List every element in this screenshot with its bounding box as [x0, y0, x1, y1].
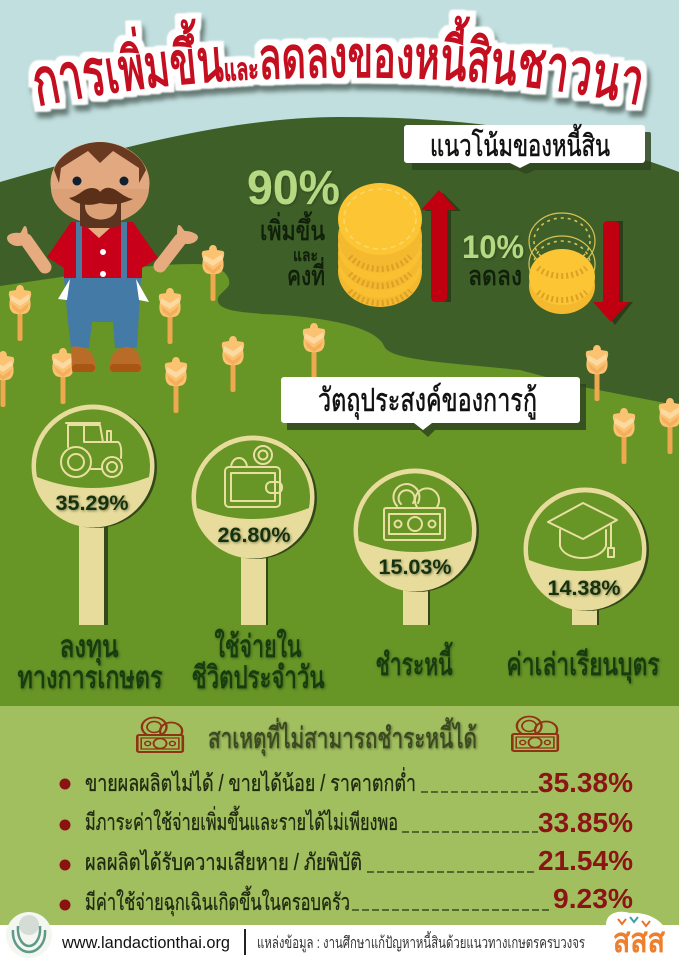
percentage: 26.80% — [218, 523, 290, 547]
reason row 2 — [60, 806, 633, 838]
suspenders — [76, 222, 127, 278]
arrow up — [421, 190, 461, 302]
dark green hill — [0, 117, 679, 440]
reason row 3: ผลผลิตได้รับความเสียหาย / ภัยพิบัติ — [85, 849, 362, 875]
reason row 4: 9.23% — [553, 883, 633, 914]
stat: 90 percent — [247, 162, 340, 291]
pin: farm investment — [32, 404, 157, 625]
reason row 4 — [60, 883, 633, 916]
stat: 90 percent: เพิ่มขึ้น — [260, 211, 325, 246]
reason row 1: ขายผลผลิตไม่ได้ / ขายได้น้อย / ราคาตกต่ำ — [85, 767, 416, 796]
stat: 90 percent: และ — [293, 246, 318, 265]
right arm — [160, 240, 180, 266]
stat: 10 percent — [462, 229, 524, 291]
stat: 90 percent: คงที่ — [287, 257, 325, 291]
left hand — [7, 226, 28, 246]
purpose labels: ชำระหนี้ — [376, 642, 452, 682]
pin: daily expenses — [192, 436, 317, 625]
banner heading: แนวโน้มของหนี้สิน — [430, 124, 610, 163]
purpose labels: ใช้จ่ายใน — [214, 629, 302, 664]
stat: 10 percent: 10% — [462, 229, 524, 265]
moustache — [69, 188, 133, 205]
beard — [80, 200, 121, 228]
collar — [88, 228, 110, 238]
icon: wallet — [225, 446, 282, 507]
percentage: 14.38% — [548, 576, 620, 600]
arrow down — [593, 221, 633, 325]
icon: tractor — [61, 423, 122, 477]
stat: 10 percent: ลดลง — [468, 261, 522, 291]
panel: reasons for non-payment — [0, 706, 679, 926]
icon: money — [384, 484, 445, 540]
purpose labels: ชีวิตประจำวัน — [192, 660, 324, 695]
head — [50, 142, 150, 224]
purpose labels — [18, 629, 660, 695]
stat: 90 percent: 90% — [247, 162, 340, 215]
reason row 4: มีค่าใช้จ่ายฉุกเฉินเกิดขึ้นในครอบครัว — [85, 886, 350, 916]
coin stack: small with faded coins — [529, 213, 595, 314]
farmer illustration — [7, 142, 198, 372]
left arm — [26, 240, 45, 267]
footer — [0, 912, 679, 960]
banner: debt trend — [404, 124, 651, 174]
light green field — [0, 264, 679, 710]
icon: graduation cap — [548, 503, 617, 558]
panel heading: สาเหตุที่ไม่สามารถชำระหนี้ได้ — [208, 717, 477, 756]
pin: debt repayment — [354, 468, 479, 625]
left shoe — [71, 347, 95, 372]
wheat field — [0, 245, 679, 464]
logo: ThaiHealth — [606, 912, 666, 960]
title: การเพิ่มขึ้นและลดลงของหนี้สินชาวนา — [28, 9, 654, 122]
reason row 1 — [60, 767, 633, 798]
reason row 2: มีภาระค่าใช้จ่ายเพิ่มขึ้นและรายได้ไม่เพียงพอ — [85, 806, 398, 835]
purpose labels: ลงทุน — [60, 629, 118, 666]
pin: tuition — [524, 488, 649, 625]
reason row 3 — [60, 845, 633, 876]
shirt buttons — [100, 249, 106, 255]
logo: Land Action Thai — [6, 912, 52, 958]
banner: loan purposes — [281, 377, 586, 437]
reason row 1: 35.38% — [538, 767, 633, 798]
coin stack: large — [338, 183, 422, 307]
icon: money right — [512, 716, 558, 751]
reason row 3: 21.54% — [538, 845, 633, 876]
percentage: 35.29% — [56, 491, 128, 515]
eyes — [72, 176, 82, 186]
website: www.landactionthai.org — [61, 933, 230, 952]
right shoe — [110, 347, 141, 372]
overalls — [64, 278, 141, 348]
red shirt — [47, 222, 158, 278]
hair — [54, 142, 146, 183]
icon: money left — [137, 718, 183, 752]
percentage: 15.03% — [379, 555, 451, 579]
right hand — [177, 225, 198, 244]
logo: ThaiHealth: สสส — [613, 922, 665, 960]
banner heading: วัตถุประสงค์ของการกู้ — [318, 382, 537, 420]
reason row 2: 33.85% — [538, 807, 633, 838]
empty pockets — [58, 279, 149, 302]
purpose labels: ทางการเกษตร — [18, 660, 162, 695]
